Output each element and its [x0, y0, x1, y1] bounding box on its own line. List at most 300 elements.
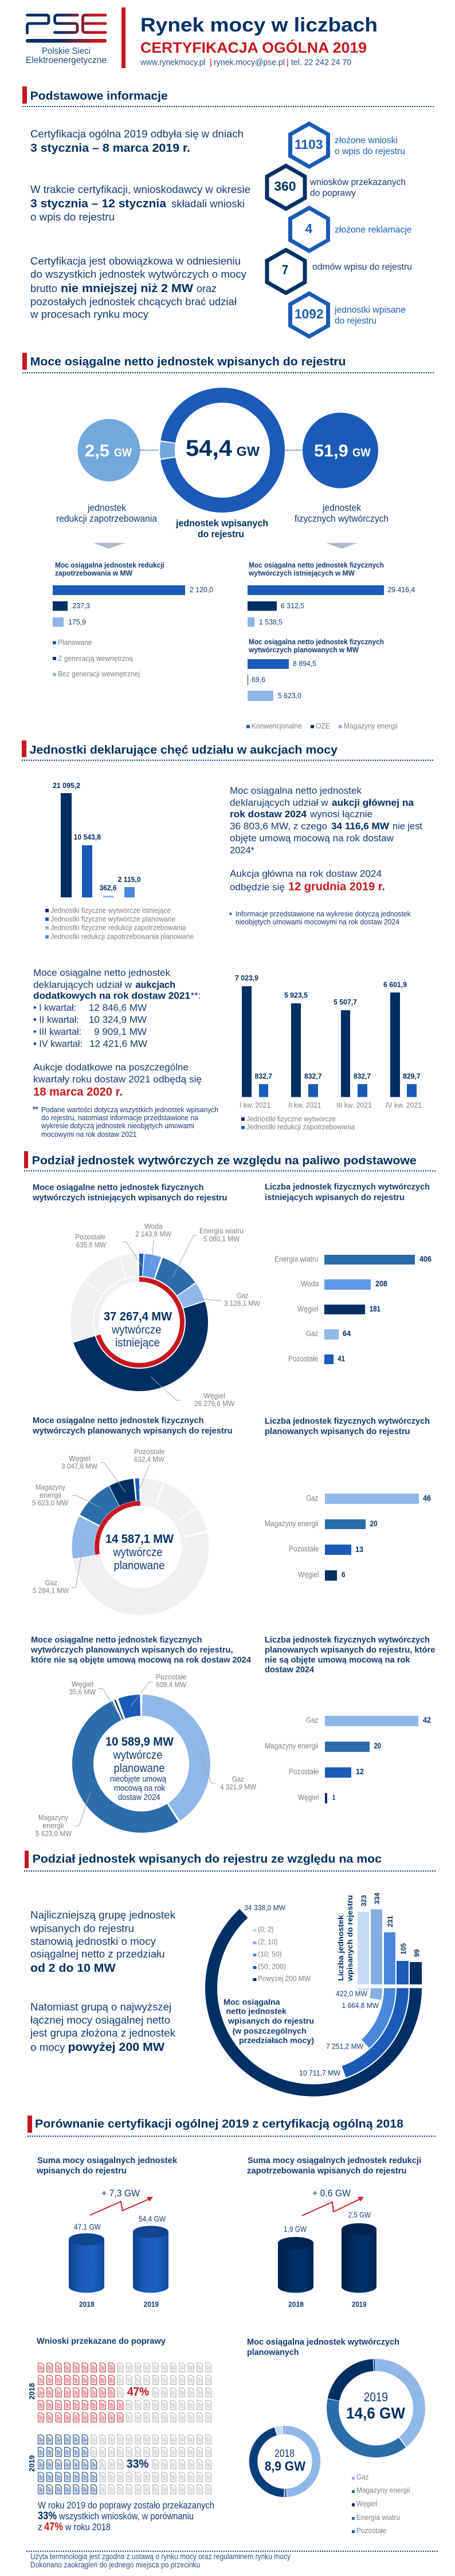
cylinder chart: suma mocy redukcji: 2,5 GW [348, 2210, 371, 2219]
legend: fizyczne: Magazyny energii [344, 722, 398, 730]
chart: moc planowanych: Moc osiągalna jednostek wytwórczych [247, 2337, 399, 2347]
logo: PSE [26, 15, 107, 65]
text block: aukcje dodatkowe: kwartały roku dostaw 2021 odbędą się [33, 1074, 202, 1085]
bar chart: kwartały 2021: 832,7 [255, 1073, 272, 1081]
hexagon: 360: 360 [274, 179, 296, 194]
legend: przedziały mocy: (50; 200) [258, 1963, 286, 1971]
circle: 2,5 GW [56, 419, 158, 524]
bar chart: liczba nieobjęte: Magazyny energii [265, 1742, 319, 1750]
footnote: aukcja główna: * [229, 911, 232, 919]
text block: aukcje dodatkowe: • I kwartał: [33, 1002, 76, 1013]
icons: documents 2019 [38, 2435, 214, 2497]
value: 47%: 47% [127, 2385, 149, 2398]
text block: aukcja główna: 34 116,6 MW [331, 821, 390, 832]
radial chart: moc wg przedziałów: 422,0 MW [336, 1990, 368, 1998]
footnote: aukcja główna: nieobjętych umowami mocowymi na rok dostaw 2024 [236, 918, 399, 926]
text block: najwyższa moc: łącznej mocy osiągalnej netto [30, 2014, 170, 2026]
donut chart: istniejące: 3 128,1 MW [224, 1299, 261, 1307]
bar chart: fizyczne planowane: Moc osiągalna netto jednostek fizycznych [249, 638, 384, 646]
chart title: istniejące moc: Moce osiągalne netto jednostek fizycznych [33, 1183, 204, 1192]
donut chart: planowane: 14 587,1 MW [105, 1533, 174, 1546]
text block: dates: 3 stycznia – 8 marca 2019 r. [30, 142, 190, 155]
cylinder chart: suma mocy redukcji: zapotrzebowania wpisanych do rejestru [247, 2167, 406, 2176]
bar chart: aukcja główna [53, 782, 141, 897]
legend: aukcja główna [45, 907, 194, 940]
bar chart: liczba nieobjęte: 1 [332, 1793, 335, 1802]
hexagon: 360: do poprawy [310, 188, 356, 198]
bar chart: liczba jednostek: 105 [399, 1943, 407, 1955]
bar chart: liczba jednostek: 323 [360, 1895, 368, 1907]
heading [28, 2116, 436, 2136]
section: aukcje mocy [22, 740, 433, 1139]
bar chart: liczba planowane: 20 [370, 1519, 378, 1528]
chart title: nieobjęte liczba [265, 1635, 436, 1675]
bar chart: liczba jednostek: Liczba jednostek [336, 1915, 345, 1981]
hexagon: 4: złożone reklamacje [335, 225, 411, 235]
hexagon: 360: wniosków przekazanych [309, 178, 406, 187]
chart caption: Moc osiągalna [223, 1998, 280, 2007]
section: podstawowe informacje [22, 86, 434, 337]
bar chart: kwartały 2021: II kw. 2021 [288, 1101, 321, 1109]
logo: PSE: Polskie Sieci [42, 46, 91, 56]
hexagon: 1103: 1103 [295, 137, 323, 152]
chart title: nieobjęte liczba: Liczba jednostek fizycznych wytwórczych [265, 1635, 430, 1645]
bar chart: liczba istniejące: Węgiel [297, 1305, 319, 1313]
text block: najliczniejsza grupa: wpisanych do rejestru [30, 1923, 134, 1935]
donut chart: nieobjęte: Magazyny [38, 1813, 68, 1822]
legend: redukcja: Planowane [58, 639, 92, 647]
hexagon: 1103: o wpis do rejestru [335, 147, 405, 156]
bar chart: liczba nieobjęte: 12 [356, 1767, 364, 1776]
bar chart: liczba nieobjęte: 42 [423, 1716, 431, 1724]
bar chart: kwartały 2021: 832,7 [354, 1073, 371, 1081]
chart caption [223, 1998, 314, 2045]
donut: 54,4 GW: 54,4 [186, 436, 233, 461]
pictogram chart: wnioski do poprawy [28, 2337, 214, 2497]
text block: najwyższa moc: Natomiast grupą o najwyższej [30, 2001, 171, 2013]
text block: aukcje dodatkowe: dodatkowych na rok dostaw 2021 [33, 990, 190, 1001]
hexagon: 4: 4 [305, 221, 312, 236]
legend: fizyczne [246, 722, 398, 730]
text block: najliczniejsza grupa: Najliczniejszą grupę jednostek [30, 1909, 176, 1921]
circle: 51,9 GW: fizycznych wytwórczych [295, 514, 389, 524]
bar chart: liczba planowane: Gaz [306, 1494, 319, 1502]
chart title: istniejące liczba [265, 1182, 430, 1203]
text block: obligation: brutto [30, 282, 57, 294]
subtitle: CERTYFIKACJA OGÓLNA 2019 [140, 39, 367, 56]
arrow: right down [326, 543, 357, 549]
cylinder chart: suma mocy redukcji: + 0,6 GW [312, 2188, 351, 2199]
text block: obligation: pozostałych jednostek chcących brać udział [30, 296, 237, 308]
chart caption: wpisanych do rejestru [227, 2016, 314, 2025]
bar chart: redukcja zapotrzebowania: zapotrzebowania w MW [55, 569, 132, 577]
donut chart: istniejące: 2 143,8 MW [135, 1230, 172, 1238]
text block: najwyższa moc: powyżej 200 MW [68, 2041, 164, 2054]
text block: aukcje dodatkowe: 12 421,6 MW [89, 1038, 147, 1049]
cylinder chart: suma mocy: wpisanych do rejestru [36, 2167, 127, 2176]
hexagon: 7: odmów wpisu do rejestru [312, 262, 412, 272]
hexagon: 1103: złożone wnioski [335, 136, 398, 145]
legend: redukcja: Z generacją wewnętrzną [58, 655, 133, 663]
icons: documents 2018 [38, 2362, 214, 2425]
radial chart: moc wg przedziałów: 1 664,8 MW [342, 2001, 379, 2010]
text block: aukcje dodatkowe: **: [191, 990, 201, 1001]
text block: aukcja główna: odbędzie się [230, 882, 285, 893]
text block: aukcje dodatkowe: • IV kwartał: [33, 1038, 83, 1049]
text block: najliczniejsza grupa: stanowią jednostki o mocy [30, 1935, 156, 1947]
contact line: | [287, 57, 289, 68]
arrow: left down [93, 543, 125, 549]
donut: 2019: 2019 [364, 2390, 388, 2404]
header [26, 7, 378, 68]
cylinder chart: suma mocy: Suma mocy osiągalnych jednostek [37, 2156, 178, 2165]
bar chart: aukcja główna: 362,6 [100, 884, 117, 892]
bar chart: kwartały 2021: 6 601,9 [383, 981, 407, 989]
text block: najliczniejsza grupa: osiągalnej netto z przedziału [30, 1948, 165, 1960]
text block: aukcja główna: aukcji głównej na [332, 797, 414, 808]
text block: obligation [30, 255, 247, 320]
text block: aukcja główna: 36 803,6 MW, z czego [230, 821, 327, 832]
bar chart: liczba istniejące: Energia wiatru [274, 1255, 319, 1263]
chart title: istniejące liczba: istniejących wpisanych do rejestru [265, 1192, 405, 1203]
donut chart: planowane: 5 284,1 MW [33, 1586, 69, 1595]
donut: 2018: 8,9 GW [265, 2459, 305, 2473]
donut: 54,4 GW: do rejestru [198, 529, 244, 539]
bar chart: aukcja główna: 2 115,0 [118, 876, 141, 884]
text block: aukcje dodatkowe: 18 marca 2020 r. [33, 1086, 123, 1098]
contact line: www.rynekmocy.pl [140, 57, 205, 68]
cylinder chart: suma mocy: + 7,3 GW [101, 2188, 140, 2199]
legend: przedziały mocy [253, 1925, 311, 1983]
donut chart: nieobjęte: planowane [113, 1762, 165, 1775]
bar chart: liczba istniejące: Gaz [306, 1329, 319, 1338]
chart title: planowane liczba: planowanych wpisanych do rejestru [265, 1427, 410, 1436]
donut chart: planowane: Węgiel [69, 1454, 91, 1463]
legend: paliwa: Magazyny energii [356, 2487, 410, 2495]
footnote: aukcje dodatkowe: Podane wartości dotyczą wszystkich jednostek wpisanych [41, 1106, 218, 1114]
hexagon: 1092: do rejestru [335, 316, 376, 326]
legend: przedziały mocy: (10; 50) [258, 1950, 282, 1958]
text block: obligation: oraz [197, 282, 217, 294]
hexagon: 4 [290, 208, 411, 251]
text block: aukcje dodatkowe: 12 846,6 MW [89, 1002, 147, 1013]
chart title: planowane moc: Moce osiągalne netto jednostek fizycznych [33, 1416, 204, 1425]
donut chart: istniejące: 26 279,6 MW [194, 1399, 235, 1408]
text block: aukcje dodatkowe: deklarujących udział w [33, 979, 132, 990]
text block: wnioski: z [38, 2522, 42, 2532]
cylinder chart: suma mocy redukcji: 1,9 GW [284, 2224, 307, 2234]
bar chart: fizyczne planowane: 69,6 [252, 675, 265, 684]
heading [22, 86, 434, 107]
bar chart: fizyczne planowane: 8 894,5 [293, 659, 316, 668]
chart title: planowane liczba [265, 1416, 430, 1436]
cylinder chart: suma mocy redukcji [247, 2156, 421, 2309]
footnote: aukcje dodatkowe: do rejestru, natomiast informacje przedstawione na [41, 1114, 198, 1122]
bar chart: liczba jednostek: 231 [386, 1916, 394, 1927]
chart: moc planowanych [246, 2337, 437, 2500]
legend: przedziały mocy: (2; 10) [258, 1938, 278, 1946]
bar chart: liczba istniejące: 41 [338, 1354, 345, 1363]
section: porównanie [28, 2116, 437, 2535]
donut chart: planowane: Gaz [45, 1578, 57, 1587]
heading: Porównanie certyfikacji ogólnej 2019 z certyfikacją ogólną 2018 [35, 2118, 403, 2130]
heading [22, 740, 433, 761]
text block: aukcje dodatkowe: 10 324,9 MW [89, 1014, 147, 1025]
cylinder chart: suma mocy: 47,1 GW [74, 2222, 101, 2231]
text block: najwyższa moc: o mocy [30, 2041, 65, 2053]
bar chart: fizyczne istniejące: 29 416,4 [387, 585, 415, 594]
bar chart: fizyczne istniejące: 1 538,5 [259, 617, 283, 627]
legend: paliwa [352, 2473, 410, 2535]
donut chart: istniejące: 635,8 MW [76, 1240, 107, 1249]
bar chart: redukcja zapotrzebowania: 175,9 [68, 617, 86, 627]
donut chart: planowane: 632,4 MW [134, 1455, 165, 1464]
logo: PSE: Elektroenergetyczne [26, 56, 107, 65]
bar chart: fizyczne istniejące: Moc osiągalna netto jednostek fizycznych [249, 561, 384, 569]
bar chart: liczba istniejące [274, 1255, 432, 1364]
circle: 51,9 GW: GW [352, 447, 371, 459]
chart title: istniejące moc: wytwórczych istniejących wpisanych do rejestru [32, 1193, 227, 1203]
bar chart: liczba nieobjęte [265, 1716, 431, 1803]
bar chart: aukcja główna: 21 095,2 [53, 782, 80, 790]
text block: obligation: Certyfikacja jest obowiązkowa w odniesieniu [30, 255, 241, 267]
donut: 2019 [315, 2347, 437, 2469]
pictogram chart: wnioski do poprawy: Wnioski przekazane do poprawy [37, 2337, 166, 2346]
donut chart: istniejące: Pozostałe [75, 1232, 105, 1241]
donut chart: nieobjęte: Węgiel [72, 1680, 93, 1688]
title: Rynek mocy w liczbach [140, 14, 378, 36]
bar chart: fizyczne istniejące [248, 561, 415, 627]
hexagon: 1092: 1092 [295, 306, 324, 321]
footnote: aukcje dodatkowe: wykresie dotyczą jednostek nieobjętych umowami [41, 1122, 194, 1130]
text block: wnioski: 47% [44, 2521, 63, 2533]
text block: applications: W trakcie certyfikacji, wnioskodawcy w okresie [30, 183, 250, 195]
heading: Jednostki deklarujące chęć udziału w aukcjach mocy [30, 744, 338, 757]
circle: 51,9 GW [295, 412, 389, 524]
footnote: aukcje dodatkowe: ** [33, 1105, 38, 1113]
text block: applications [30, 183, 250, 223]
text block: aukcja główna: Moc osiągalna netto jednostek [230, 785, 362, 796]
cylinder chart: suma mocy redukcji: Suma mocy osiągalnych jednostek redukcji [248, 2156, 421, 2165]
heading [24, 1151, 436, 1171]
bar chart: fizyczne planowane: wytwórczych planowanych w MW [248, 646, 359, 654]
bar chart: redukcja zapotrzebowania [53, 561, 213, 627]
bar chart: liczba jednostek: 334 [373, 1893, 381, 1904]
text block: najwyższa moc: jest grupa złożona z jednostek [30, 2027, 176, 2039]
text block: dates: Certyfikacja ogólna 2019 odbyła się w dniach [30, 128, 244, 140]
legend: kwartały: Jednostki fizyczne wytwórcze [246, 1115, 336, 1123]
chart title: nieobjęte moc: wytwórczych planowanych wpisanych do rejestru, [30, 1645, 233, 1655]
text block: dates [30, 128, 244, 155]
footnote: aukcje dodatkowe: mocowymi na rok dostaw 2021 [41, 1131, 137, 1139]
text block: aukcja główna: Aukcja główna na rok dostaw 2024 [230, 868, 382, 879]
donut chart: planowane: energii [40, 1491, 61, 1499]
chart title: nieobjęte moc: Moce osiągalne netto jednostek fizycznych [31, 1635, 202, 1645]
bar chart: fizyczne istniejące: wytwórczych istniejących w MW [248, 569, 355, 577]
text block: wnioski: W roku 2019 do poprawy zostało przekazanych [38, 2500, 214, 2511]
bar chart: liczba jednostek: wpisanych do rejestru [346, 1895, 354, 1982]
bar chart: liczba planowane: Magazyny energii [265, 1519, 319, 1528]
section: podział wg mocy [24, 1851, 436, 2090]
bar chart: liczba istniejące: Pozostałe [288, 1354, 319, 1363]
bar chart: liczba istniejące: 64 [343, 1329, 351, 1338]
text block: obligation: w procesach rynku mocy [30, 308, 149, 320]
donut chart: planowane: Magazyny [36, 1483, 65, 1491]
donut chart: planowane [32, 1447, 220, 1626]
chart title: nieobjęte liczba: nie są objęte umową mocową na rok [265, 1655, 410, 1665]
circle: 51,9 GW: jednostek [322, 503, 362, 513]
legend: przedziały mocy: (0; 2) [258, 1925, 274, 1933]
hexagon: 1092: jednostki wpisane [334, 305, 406, 315]
bar chart: kwartały 2021: 832,7 [304, 1073, 322, 1081]
text block: aukcja główna: 2024* [230, 845, 254, 856]
text block: aukcje dodatkowe: • III kwartał: [33, 1026, 81, 1037]
bar chart: redukcja zapotrzebowania: 2 120,0 [190, 585, 213, 594]
donut chart: nieobjęte [36, 1672, 257, 1844]
contact line [140, 57, 351, 68]
text block: obligation: do wszystkich jednostek wytwórczych o mocy [30, 268, 247, 280]
chart title: nieobjęte liczba: dostaw 2024 [265, 1665, 315, 1675]
bar chart: kwartały 2021: IV kw. 2021 [386, 1101, 422, 1109]
legend: kwartały: Jednostki redukcji zapotrzebowania [246, 1123, 355, 1131]
bar chart: liczba planowane: Węgiel [298, 1570, 319, 1579]
circle: 51,9 GW: 51,9 [314, 442, 348, 460]
contact line: tel. 22 242 24 70 [291, 57, 351, 68]
hexagon: 7: 7 [282, 262, 288, 277]
footer: Dokonano zaokrągleń do jednego miejsca po przecinku [30, 2561, 200, 2569]
donut chart: nieobjęte: 35,6 MW [69, 1688, 96, 1696]
text block: najwyższa moc [30, 2001, 176, 2054]
chart caption: przedziałach mocy) [239, 2036, 314, 2045]
donut chart: nieobjęte: dostaw 2024 [118, 1793, 160, 1802]
cylinder chart: suma mocy: 2018 [79, 2300, 95, 2309]
pictogram chart: wnioski do poprawy: 2018 [28, 2383, 36, 2400]
header divider [121, 7, 125, 68]
donut chart: nieobjęte: 10 589,9 MW [105, 1735, 174, 1748]
radial chart: moc wg przedziałów [211, 1886, 416, 2090]
footer [26, 2551, 438, 2569]
legend: fizyczne: OZE [316, 722, 330, 730]
bar chart: liczba nieobjęte: 20 [374, 1742, 381, 1750]
hexagon: 7 [267, 250, 412, 293]
donut: 2019: 14,6 GW [346, 2404, 406, 2422]
section: podział wg paliwa [24, 1151, 436, 1844]
chart title: nieobjęte moc [30, 1635, 252, 1665]
text block: wnioski: wszystkich wniosków, w porównaniu [58, 2511, 194, 2522]
bar chart: fizyczne planowane: 5 623,0 [278, 691, 301, 700]
footnote: aukcje dodatkowe [33, 1105, 218, 1139]
donut chart: istniejące: 5 080,1 MW [203, 1235, 240, 1243]
text block: aukcja główna: 12 grudnia 2019 r. [288, 881, 385, 893]
text block: aukcje dodatkowe: aukcjach [135, 979, 175, 990]
donut chart: nieobjęte: wytwórcze [113, 1749, 163, 1762]
legend: aukcja główna: Jednostki redukcji zapotrzebowania planowane [50, 932, 194, 940]
bar chart: liczba jednostek [336, 1893, 422, 1984]
bar chart: liczba nieobjęte: Gaz [306, 1716, 319, 1724]
bar chart: kwartały 2021: III kw. 2021 [336, 1101, 372, 1109]
legend: paliwa: Pozostałe [356, 2527, 386, 2535]
donut: 54,4 GW: jednostek wpisanych [175, 518, 268, 529]
footnote: aukcja główna [229, 910, 411, 926]
circle: 2,5 GW: GW [114, 447, 132, 459]
bar chart: kwartały 2021: 7 023,9 [235, 974, 258, 982]
text block: wnioski [38, 2500, 214, 2533]
bar chart: kwartały 2021: I kw. 2021 [240, 1101, 270, 1109]
donut chart: planowane: planowane [113, 1559, 165, 1572]
bar chart: liczba istniejące: Woda [301, 1279, 319, 1288]
legend: paliwa: Węgiel [356, 2500, 377, 2508]
legend: kwartały [241, 1115, 355, 1131]
bar chart: liczba planowane: Pozostałe [289, 1545, 319, 1553]
bar chart: liczba planowane [265, 1494, 431, 1581]
text block: aukcja główna [230, 785, 422, 893]
donut chart: istniejące [58, 1222, 261, 1408]
donut chart: nieobjęte: Pozostałe [156, 1672, 187, 1681]
bar chart: liczba nieobjęte: Pozostałe [289, 1767, 319, 1776]
circle: 2,5 GW: 2,5 [85, 442, 109, 460]
donut chart: planowane: 5 623,0 MW [32, 1499, 69, 1507]
bar chart: kwartały 2021: 829,7 [403, 1073, 421, 1081]
bar chart: liczba jednostek: 99 [413, 1949, 421, 1957]
cylinder chart: suma mocy: 54,4 GW [139, 2214, 166, 2223]
circle: 2,5 GW: jednostek [87, 503, 127, 513]
legend: fizyczne: Konwencjonalne [252, 722, 302, 730]
text block: aukcja główna: objęte umową mocową na rok dostaw [230, 833, 394, 844]
donut chart: nieobjęte: 5 623,0 MW [36, 1829, 72, 1838]
donut chart: istniejące: Gaz [237, 1291, 248, 1300]
text block: aukcja główna: deklarujących udział w [230, 797, 328, 808]
bar chart: aukcja główna: 10 543,8 [74, 833, 101, 841]
chart title: planowane moc [32, 1416, 233, 1436]
text block: aukcje dodatkowe: Moce osiągalne netto jednostek [33, 967, 170, 978]
footnote: aukcja główna: Informacje przedstawione na wykresie dotyczą jednostek [236, 910, 411, 918]
donut chart: nieobjęte: Gaz [232, 1775, 244, 1783]
hexagon: 360 [267, 166, 406, 208]
text block: aukcje dodatkowe: Aukcje dodatkowe na poszczególne [33, 1062, 189, 1073]
text block: applications: 3 stycznia – 12 stycznia [30, 198, 167, 210]
donut chart: istniejące: Węgiel [203, 1392, 225, 1400]
radial chart: moc wg przedziałów: 34 338,0 MW [244, 1904, 286, 1912]
value: 33%: 33% [127, 2457, 149, 2471]
chart title: istniejące moc [32, 1183, 227, 1203]
legend: aukcja główna: Jednostki fizyczne redukcji zapotrzebowania [50, 924, 186, 932]
bar chart: liczba planowane: 13 [355, 1545, 363, 1554]
chart title: planowane moc: wytwórczych planowanych wpisanych do rejestru [32, 1426, 233, 1436]
donut: 54,4 GW [159, 387, 285, 539]
donut chart: nieobjęte: nieobjęte umową [110, 1775, 167, 1784]
bar chart: kwartały 2021 [235, 974, 422, 1109]
cylinder chart: suma mocy [36, 2156, 178, 2309]
circle: 2,5 GW: redukcji zapotrzebowania [56, 514, 158, 524]
text block: aukcja główna: nie jest [393, 821, 422, 832]
donut chart: nieobjęte: 609,4 MW [156, 1680, 187, 1689]
bar chart: fizyczne planowane [248, 638, 384, 701]
heading [24, 1851, 436, 1871]
bar chart: fizyczne istniejące: 6 312,5 [281, 601, 304, 610]
text block: applications: składali wnioski [171, 198, 245, 210]
donut chart: planowane: Pozostałe [134, 1447, 165, 1456]
donut chart: nieobjęte: 4 321,9 MW [220, 1783, 257, 1791]
bar chart: kwartały 2021: 5 507,7 [334, 998, 357, 1006]
bar chart: liczba planowane: 6 [342, 1570, 346, 1579]
cylinder chart: suma mocy redukcji: 2019 [352, 2300, 367, 2309]
chart caption: (w poszczególnych [233, 2026, 307, 2035]
contact line: | [210, 57, 212, 68]
donut: 54,4 GW: GW [237, 444, 260, 459]
chart title: nieobjęte liczba: planowanych wpisanych do rejestru, które [265, 1645, 436, 1655]
donut: 2018 [246, 2423, 324, 2500]
chart title: nieobjęte moc: które nie są objęte umową mocową na rok dostaw 2024 [31, 1655, 252, 1665]
